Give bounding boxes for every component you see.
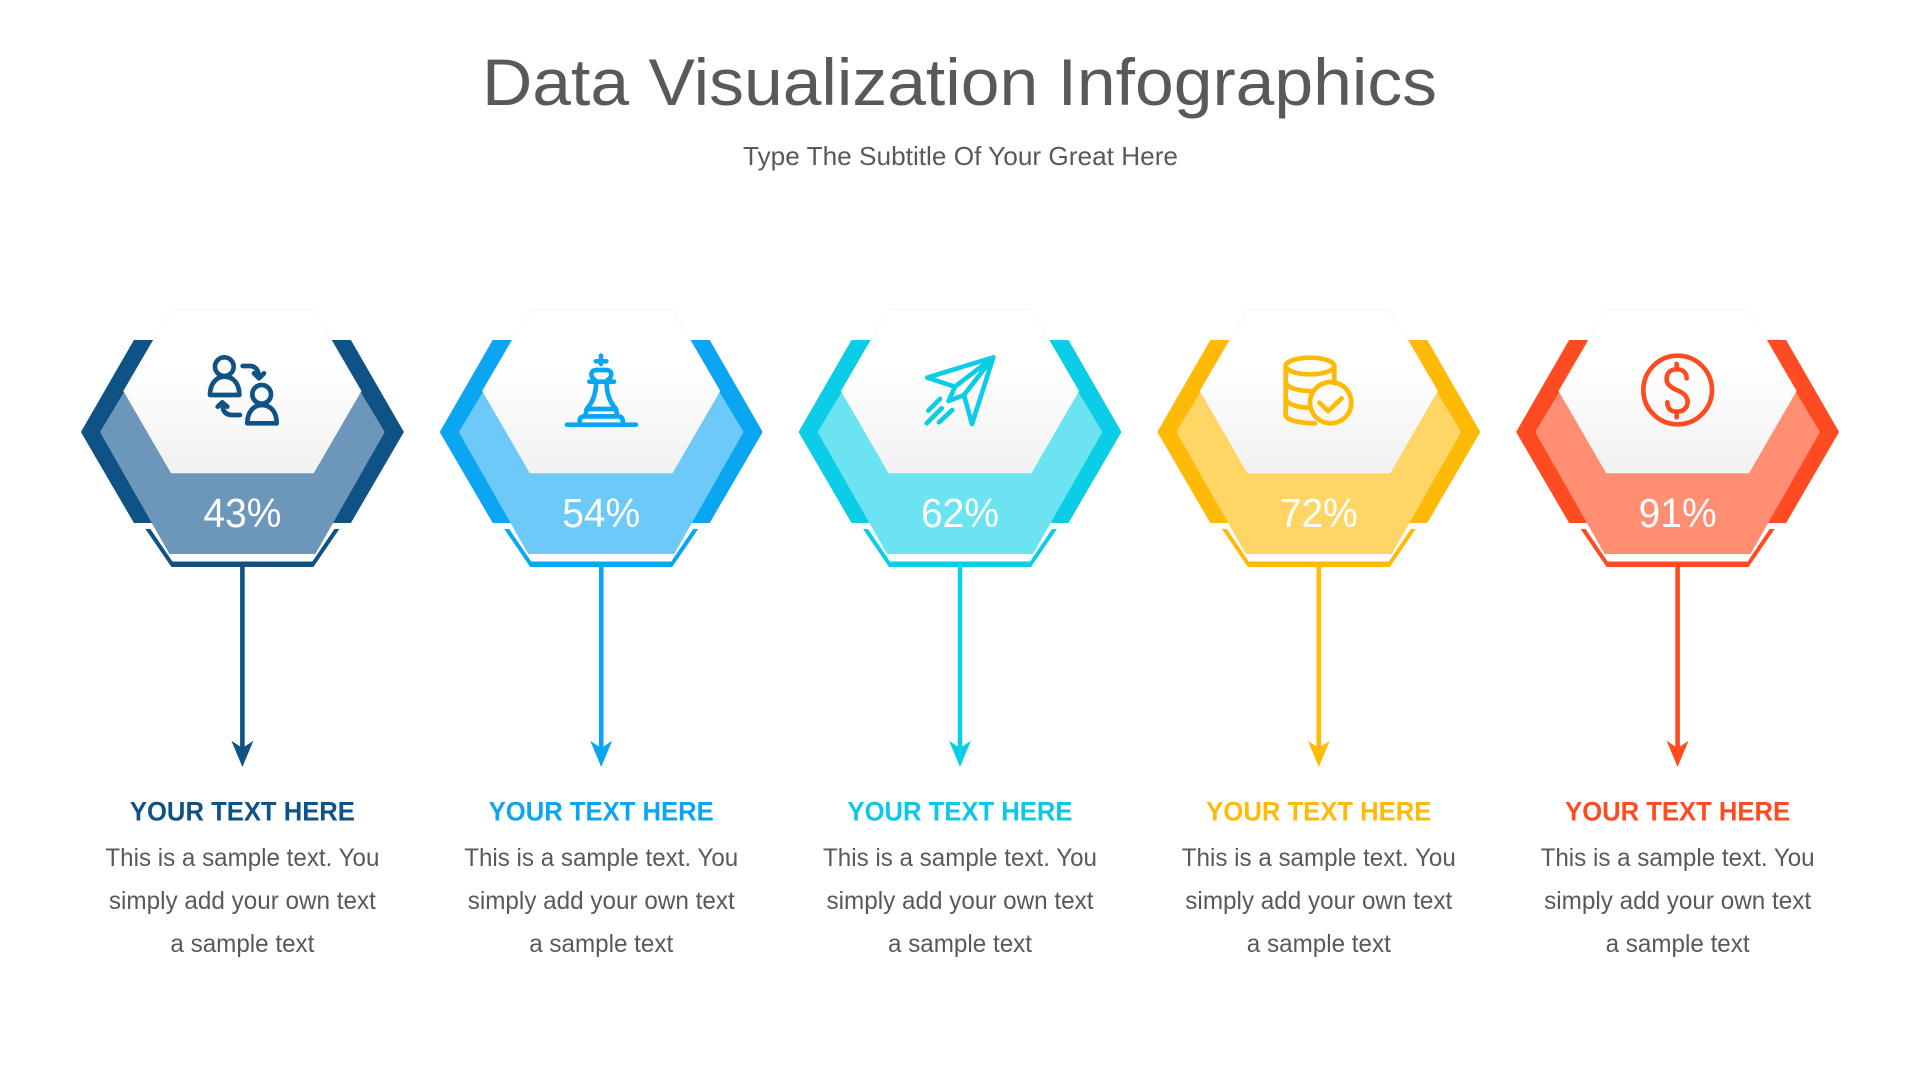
heading: YOUR TEXT HERE — [1565, 796, 1790, 826]
body text: simply add your own text — [1544, 887, 1811, 915]
arrow — [949, 565, 971, 767]
icon: paper plane — [927, 357, 993, 424]
hexagon outer band — [798, 340, 1122, 523]
hexagon light fill — [1176, 391, 1461, 554]
hexagon white top — [124, 310, 361, 473]
icon: people exchange — [210, 357, 277, 423]
percentage: 91% — [1639, 490, 1717, 536]
panel: column 3, 62% — [798, 310, 1122, 958]
hexagon outer band — [1516, 340, 1839, 523]
icon: database with check — [1286, 358, 1351, 423]
panel: column 4, 72% — [1157, 310, 1480, 958]
panel: column 1, 43% — [81, 310, 404, 958]
body text: This is a sample text. You — [105, 844, 379, 872]
body text: simply add your own text — [109, 887, 376, 915]
bottom chevron — [1581, 529, 1775, 567]
hexagon light fill — [459, 391, 744, 554]
body text: a sample text — [1606, 930, 1750, 958]
percentage: 54% — [562, 490, 640, 536]
heading: YOUR TEXT HERE — [848, 796, 1072, 826]
hexagon white top — [1200, 310, 1437, 473]
body text: This is a sample text. You — [464, 844, 738, 872]
body text: simply add your own text — [468, 887, 735, 915]
body text: a sample text — [1247, 930, 1391, 958]
body text — [1182, 844, 1456, 958]
percentage: 43% — [203, 490, 281, 536]
hexagon white top — [483, 310, 720, 473]
hexagon light fill — [1535, 391, 1820, 554]
subtitle: Type The Subtitle Of Your Great Here — [743, 141, 1178, 171]
title: Data Visualization Infographics — [482, 45, 1437, 119]
percentage: 62% — [921, 490, 999, 536]
body text — [1541, 844, 1815, 958]
hexagon white top — [842, 310, 1078, 473]
icon: dollar coin — [1643, 356, 1712, 424]
arrow — [590, 565, 612, 767]
heading: YOUR TEXT HERE — [1206, 796, 1431, 826]
body text: simply add your own text — [826, 887, 1094, 915]
body text — [464, 844, 738, 958]
body text — [105, 844, 379, 958]
arrow — [1308, 565, 1330, 767]
hexagon light fill — [818, 391, 1102, 554]
arrow — [231, 565, 253, 767]
body text: a sample text — [888, 930, 1032, 958]
bottom chevron — [1222, 529, 1416, 567]
panel: column 2, 54% — [440, 310, 763, 958]
heading: YOUR TEXT HERE — [489, 796, 714, 826]
body text: simply add your own text — [1185, 887, 1452, 915]
body text: This is a sample text. You — [1182, 844, 1456, 872]
body text: a sample text — [170, 930, 314, 958]
percentage: 72% — [1280, 490, 1358, 536]
bottom chevron — [145, 529, 339, 567]
hexagon outer band — [81, 340, 404, 523]
bottom chevron — [504, 529, 698, 567]
hexagon outer band — [1157, 340, 1480, 523]
body text — [823, 844, 1097, 958]
body text: a sample text — [529, 930, 673, 958]
bottom chevron — [863, 529, 1057, 567]
hexagon light fill — [100, 391, 385, 554]
body text: This is a sample text. You — [823, 844, 1097, 872]
hexagon white top — [1559, 310, 1796, 473]
body text: This is a sample text. You — [1541, 844, 1815, 872]
heading: YOUR TEXT HERE — [130, 796, 355, 826]
icon: chess king — [567, 356, 636, 425]
hexagon outer band — [440, 340, 763, 523]
arrow — [1667, 565, 1689, 767]
panel: column 5, 91% — [1516, 310, 1839, 958]
